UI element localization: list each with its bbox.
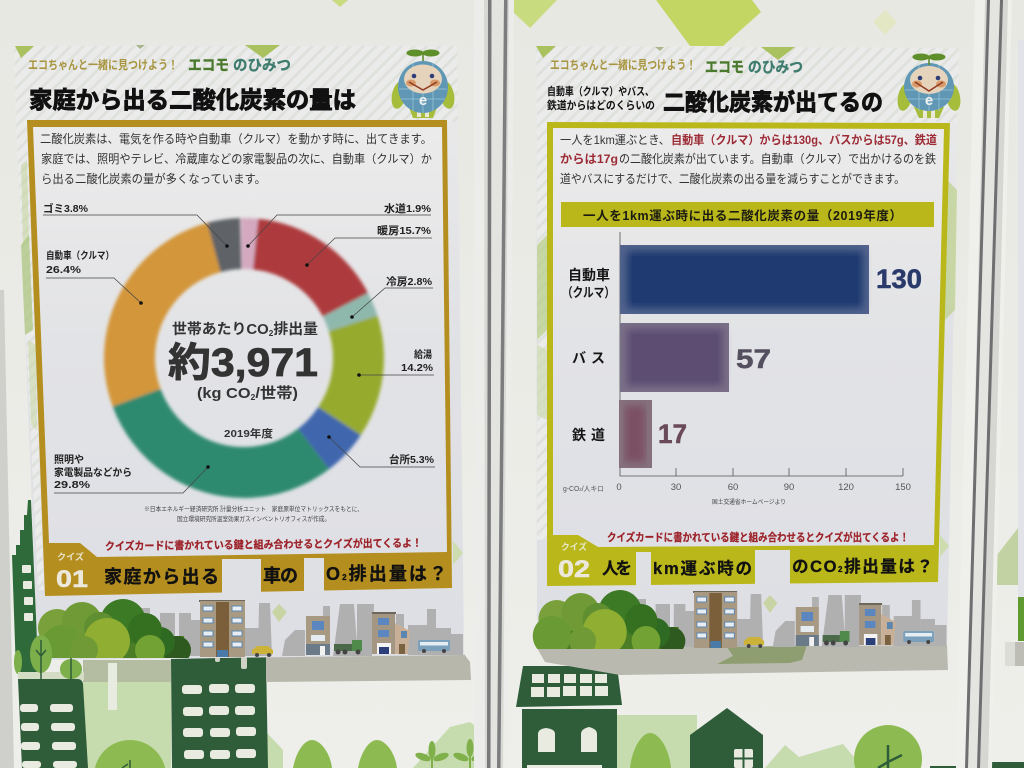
poster 1 board [14,45,464,660]
poster 1 heading tagline: エコモ [188,57,229,74]
donut centre readout: 2019年度 [224,427,274,440]
poster 2 cityscape [532,590,946,649]
category labels: 自動車 [568,267,610,283]
skyline [140,603,463,656]
small shop building [306,616,330,655]
category labels [562,267,615,443]
axis tick labels: 90 [784,482,794,493]
poster 2 quiz hint: クイズカードに書かれている鍵と組み合わせるとクイズが出てくるよ！ [607,530,909,544]
axis tick labels: 30 [671,482,681,493]
label: cooling: 冷房2.8% [386,275,433,288]
label: car: 26.4% [46,264,82,276]
poster 1 explanatory text [40,132,432,186]
house with garage [372,612,410,654]
yellow car [744,637,764,648]
poster 1 quiz question [104,564,447,587]
poster 2 title: 二酸化炭素が出てるの [663,89,883,115]
poster 2 explanatory text: 道やバスにするだけで、二酸化炭素の出る量を減らすことができます。 [560,172,905,186]
poster 2 quiz question [602,557,933,578]
poster 2 heading tagline [550,57,803,76]
poster 2 title: 自動車（クルマ）やバス、 [547,84,654,98]
poster 1 source note: 国立環境研究所温室効果ガスインベントリオフィスが作成。 [177,514,330,523]
bar chart heading [561,202,934,227]
poster 1 source note: ※日本エネルギー経済研究所 計量分析ユニット 家庭原単位マトリックスをもとに、 [144,504,363,513]
trees [38,599,191,658]
poster 2 [533,46,963,656]
poster 2 explanatory text: の二酸化炭素が出ています。自動車（クルマ）で出かけるのを鉄 [619,152,936,166]
poster 1 cityscape [38,599,463,658]
top wall decorations [332,0,897,46]
small shop building [796,607,819,646]
dump truck [334,640,362,654]
apartment block [693,591,737,648]
label: lighting and appliances: 家電製品などから [54,466,132,479]
poster 2 heading tagline: エコちゃんと一緒に見つけよう！ [550,57,696,72]
poster 1 explanatory text: 家庭では、照明やテレビ、冷蔵庫などの家電製品の次に、自動車（クルマ）か [41,152,432,166]
light diamond [763,595,778,613]
poster 1 source note [144,504,363,523]
column rail left [474,0,514,768]
poster 1 quiz badge: 01 [56,566,88,593]
poster 1 frame and quiz strip [27,120,452,597]
poster 1 explanatory text: ら出る二酸化炭素の量が多くなっています。 [41,172,266,186]
axis unit: g-CO2/人キロ [563,485,604,493]
poster 2 board [536,46,959,648]
donut centre readout: /世帯) [255,385,298,402]
label: hot water: 14.2% [401,362,434,374]
bar: bus 57: 57 [736,344,771,374]
poster 2 quiz question: のCO2排出量は？ [792,557,933,576]
poster 2 shadow [537,645,948,675]
poster 2 explanatory text: からは17g [560,153,618,166]
label: lighting and appliances [54,454,210,493]
poster 2 heading tagline: のひみつ [748,59,803,76]
poster 1 quiz question: 家庭から出る [104,567,219,587]
bar chart heading: 一人を1km運ぶ時に出る二酸化炭素の量（2019年度） [583,208,902,223]
yellow car [252,646,273,657]
small trees at poster foot [30,635,82,679]
label: garbage: ゴミ3.8% [43,202,89,215]
mascot eco-chan [389,50,457,118]
poster 1 explanatory text: 二酸化炭素は、電気を作る時や自動車（クルマ）を動かす時に、出てきます。 [40,132,432,146]
trees [532,590,686,649]
axis tick labels [616,482,911,493]
label: car [46,249,143,305]
poster 2 explanatory text: 一人を1km運ぶとき、 [560,134,670,147]
donut centre readout: 2 [251,393,256,402]
bar: car 130 [620,245,922,314]
poster 1 quiz question: O 2排出量は？ [326,564,447,584]
mascot eco-chan: e [419,92,427,109]
donut centre readout [168,320,318,440]
label: heating [305,224,432,267]
label: heating: 暖房15.7% [377,224,432,237]
poster 1 heading tagline [28,57,291,74]
skyline [636,594,946,647]
label: hot water: 給湯 [414,348,432,361]
poster 2 quiz badge [558,541,590,583]
label: garbage [43,202,229,248]
label: lighting and appliances: 29.8% [54,479,91,491]
poster 2 quiz badge: クイズ [561,541,587,552]
label: hot water [357,348,434,377]
chart source: 国土交通省ホームページより [712,498,786,506]
poster 2 title [547,84,883,115]
poster 2 explanatory text: 自動車（クルマ）からは130g、バスからは57g、鉄道 [671,133,937,147]
label: water [246,202,432,248]
house with garage [859,603,896,645]
axes [620,232,903,476]
category labels: バス [572,350,605,366]
axis tick labels: 150 [895,482,911,493]
label: water: 水道1.9% [384,202,432,215]
donut centre readout: 排出量 [273,320,318,338]
column rail far left [0,290,14,768]
axis tick labels: 0 [616,482,622,493]
poster 1 title: 家庭から出る二酸化炭素の量は [29,87,356,113]
label: kitchen: 台所5.3% [389,453,435,466]
donut chart [43,202,435,493]
poster 1 [14,45,464,665]
apartment block [199,600,245,657]
category labels: 鉄道 [572,427,605,443]
poster 1 shadow [266,654,471,682]
poster 1 quiz badge [56,551,88,593]
poster 2 explanatory text [560,133,937,186]
bar chart [562,232,922,506]
poster 2 title: 鉄道からはどのくらいの [547,98,655,112]
mascot eco-chan: e [925,92,933,109]
donut centre readout: 約3,971 [168,341,318,385]
neighbouring poster edge [997,40,1024,666]
donut centre readout: (kg CO [197,385,246,402]
poster 1 heading tagline: エコちゃんと一緒に見つけよう！ [28,57,178,72]
lower wall graphics right [516,666,1024,768]
label: lighting and appliances: 照明や [54,454,84,466]
poster 1 heading tagline: のひみつ [233,57,291,74]
bar: car 130: 130 [876,264,922,294]
lower wall graphics left [12,500,488,768]
blue bus [903,631,934,644]
label: cooling [350,275,433,319]
blue bus [418,640,450,653]
poster 2 quiz question: km運ぶ時の [653,559,752,578]
poster 1 quiz badge: クイズ [57,551,84,562]
poster 2 heading tagline: エコモ [705,59,744,76]
poster 2 quiz badge: 02 [558,556,590,583]
label: kitchen [327,435,435,467]
dump truck [823,631,850,646]
light diamond [272,604,287,622]
poster 1 quiz question: 車の [263,566,298,586]
bar: bus 57 [620,323,771,392]
column rail right [956,0,1012,768]
mascot eco-chan [895,54,963,118]
bar: rail 17 [619,400,687,468]
poster 2 frame and quiz strip [547,122,950,586]
axis tick labels: 60 [728,482,738,493]
donut centre readout: 世帯あたりCO [172,322,266,338]
category labels: （クルマ） [562,285,615,300]
bar: rail 17: 17 [658,419,687,449]
poster 1 quiz hint: クイズカードに書かれている鍵と組み合わせるとクイズが出てくるよ！ [105,536,422,553]
poster 2 quiz question: 人を [602,559,632,578]
axis tick labels: 120 [838,482,854,493]
label: car: 自動車（クルマ） [46,249,114,262]
donut centre readout: 2 [269,329,274,338]
